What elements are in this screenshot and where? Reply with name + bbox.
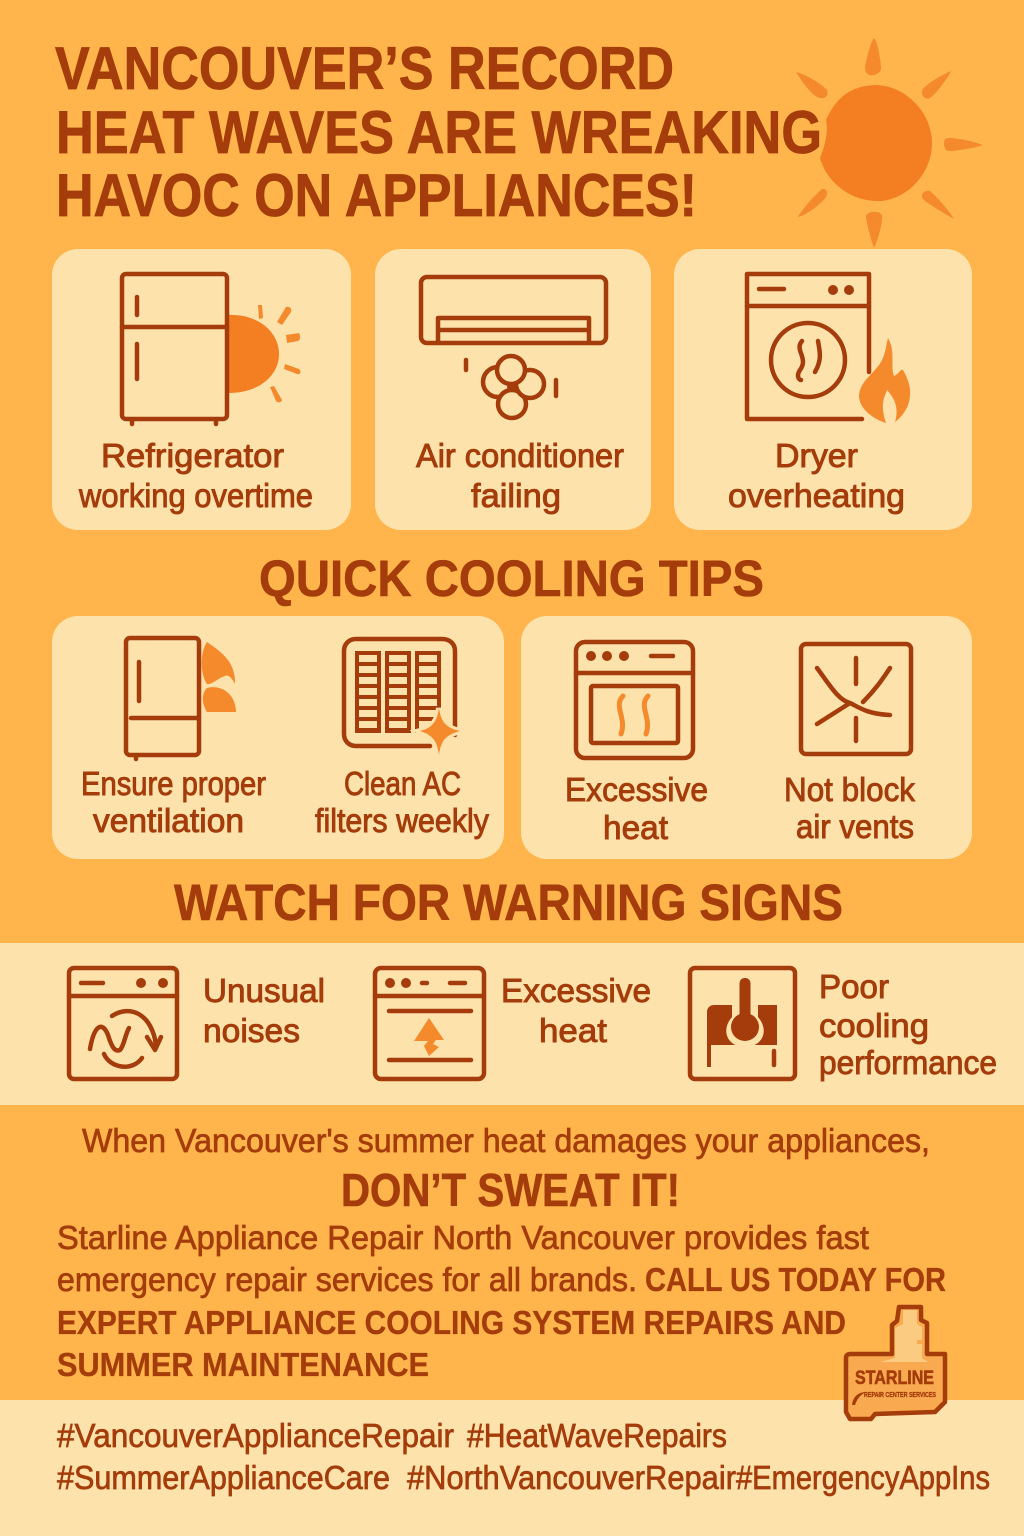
- hashtags: #EmergencyAppIns: [736, 1459, 990, 1496]
- label: refrigerator: working overtime: [78, 477, 313, 514]
- hashtags: #SummerApplianceCare: [57, 1459, 390, 1496]
- label: AC filters: [315, 765, 489, 839]
- label: unusual noises: Unusual: [203, 972, 325, 1009]
- title: HEAT WAVES ARE WREAKING: [56, 99, 822, 166]
- text block: call to action: Starline Appliance Repair North Vancouver provides fast: [57, 1219, 869, 1256]
- label: excessive heat warning: Excessive: [501, 972, 651, 1009]
- icon: oven with heat arrow: [375, 968, 484, 1079]
- label: air conditioner: [416, 437, 624, 514]
- hashtags: #VancouverApplianceRepair: [57, 1417, 454, 1454]
- panel: air conditioner failing: [375, 249, 651, 530]
- label: AC filters: Clean AC: [344, 765, 461, 802]
- panel: dryer overheating: [674, 249, 972, 530]
- hashtags: #NorthVancouverRepair: [407, 1459, 736, 1496]
- icon: air vent: [801, 644, 911, 754]
- label: air conditioner: failing: [471, 477, 561, 514]
- logo: starline: [846, 1307, 945, 1419]
- icon: air conditioner with fan: [421, 277, 606, 418]
- panel: hashtags band: [0, 1400, 1024, 1536]
- panel: tips right: [521, 616, 972, 859]
- icon: refrigerator with sun: [122, 274, 300, 424]
- heading: watch for warning signs: WATCH FOR WARNING SIGNS: [174, 874, 843, 931]
- heading: quick cooling tips: QUICK COOLING TIPS: [259, 550, 764, 607]
- title: [55, 35, 822, 229]
- label: excessive heat: heat: [603, 809, 668, 846]
- logo: starline: STARLINE: [855, 1368, 934, 1389]
- panel: refrigerator working overtime: [52, 249, 351, 530]
- icon: washer with noise wave: [69, 968, 177, 1079]
- icon: thermometer gauge: [690, 968, 795, 1079]
- label: ventilation: ventilation: [93, 802, 244, 839]
- icon: sun: [796, 38, 983, 248]
- label: AC filters: filters weekly: [315, 802, 489, 839]
- text block: call to action: SUMMER MAINTENANCE: [57, 1346, 429, 1383]
- label: excessive heat warning: heat: [539, 1012, 607, 1049]
- label: poor cooling performance: performance: [819, 1044, 997, 1081]
- label: excessive heat: Excessive: [565, 771, 708, 808]
- hashtags: [57, 1417, 990, 1496]
- label: poor cooling performance: Poor: [819, 968, 889, 1005]
- hashtags: #HeatWaveRepairs: [467, 1417, 727, 1454]
- text block: call to action: [57, 1122, 946, 1383]
- label: dryer: Dryer: [775, 437, 858, 474]
- label: dryer: [728, 437, 905, 514]
- label: excessive heat warning: [501, 972, 651, 1049]
- label: refrigerator: Refrigerator: [101, 437, 284, 474]
- label: unusual noises: [203, 972, 325, 1049]
- label: poor cooling performance: cooling: [819, 1007, 929, 1044]
- label: not block air vents: air vents: [796, 808, 914, 845]
- text block: call to action: When Vancouver's summer heat damages your appliances,: [82, 1122, 930, 1159]
- heading: don't sweat it: DON’T SWEAT IT!: [341, 1164, 680, 1216]
- label: not block air vents: Not block: [784, 771, 915, 808]
- logo: starline: REPAIR CENTER SERVICES: [864, 1392, 936, 1399]
- title: HAVOC ON APPLIANCES!: [56, 162, 697, 229]
- icon: oven with heat: [576, 642, 693, 758]
- label: refrigerator: [78, 437, 313, 514]
- label: ventilation: [81, 765, 266, 839]
- title: VANCOUVER’S RECORD: [55, 35, 674, 102]
- icon: refrigerator with flame: [126, 638, 236, 759]
- label: poor cooling performance: [819, 968, 997, 1081]
- text block: call to action: CALL US TODAY FOR: [645, 1261, 946, 1298]
- panel: tips left: [52, 616, 504, 859]
- label: unusual noises: noises: [203, 1012, 300, 1049]
- icon: dryer with flame: [747, 274, 910, 423]
- text block: call to action: EXPERT APPLIANCE COOLING SYSTEM REPAIRS AND: [57, 1304, 846, 1341]
- label: excessive heat: [565, 771, 708, 846]
- icon: AC filter with sparkle: [344, 639, 460, 755]
- label: ventilation: Ensure proper: [81, 765, 266, 802]
- label: dryer: overheating: [728, 477, 905, 514]
- text block: call to action: emergency repair services for all brands.: [57, 1261, 637, 1298]
- label: air conditioner: Air conditioner: [416, 437, 624, 474]
- panel: warning signs band: [0, 943, 1024, 1105]
- label: not block air vents: [784, 771, 915, 845]
